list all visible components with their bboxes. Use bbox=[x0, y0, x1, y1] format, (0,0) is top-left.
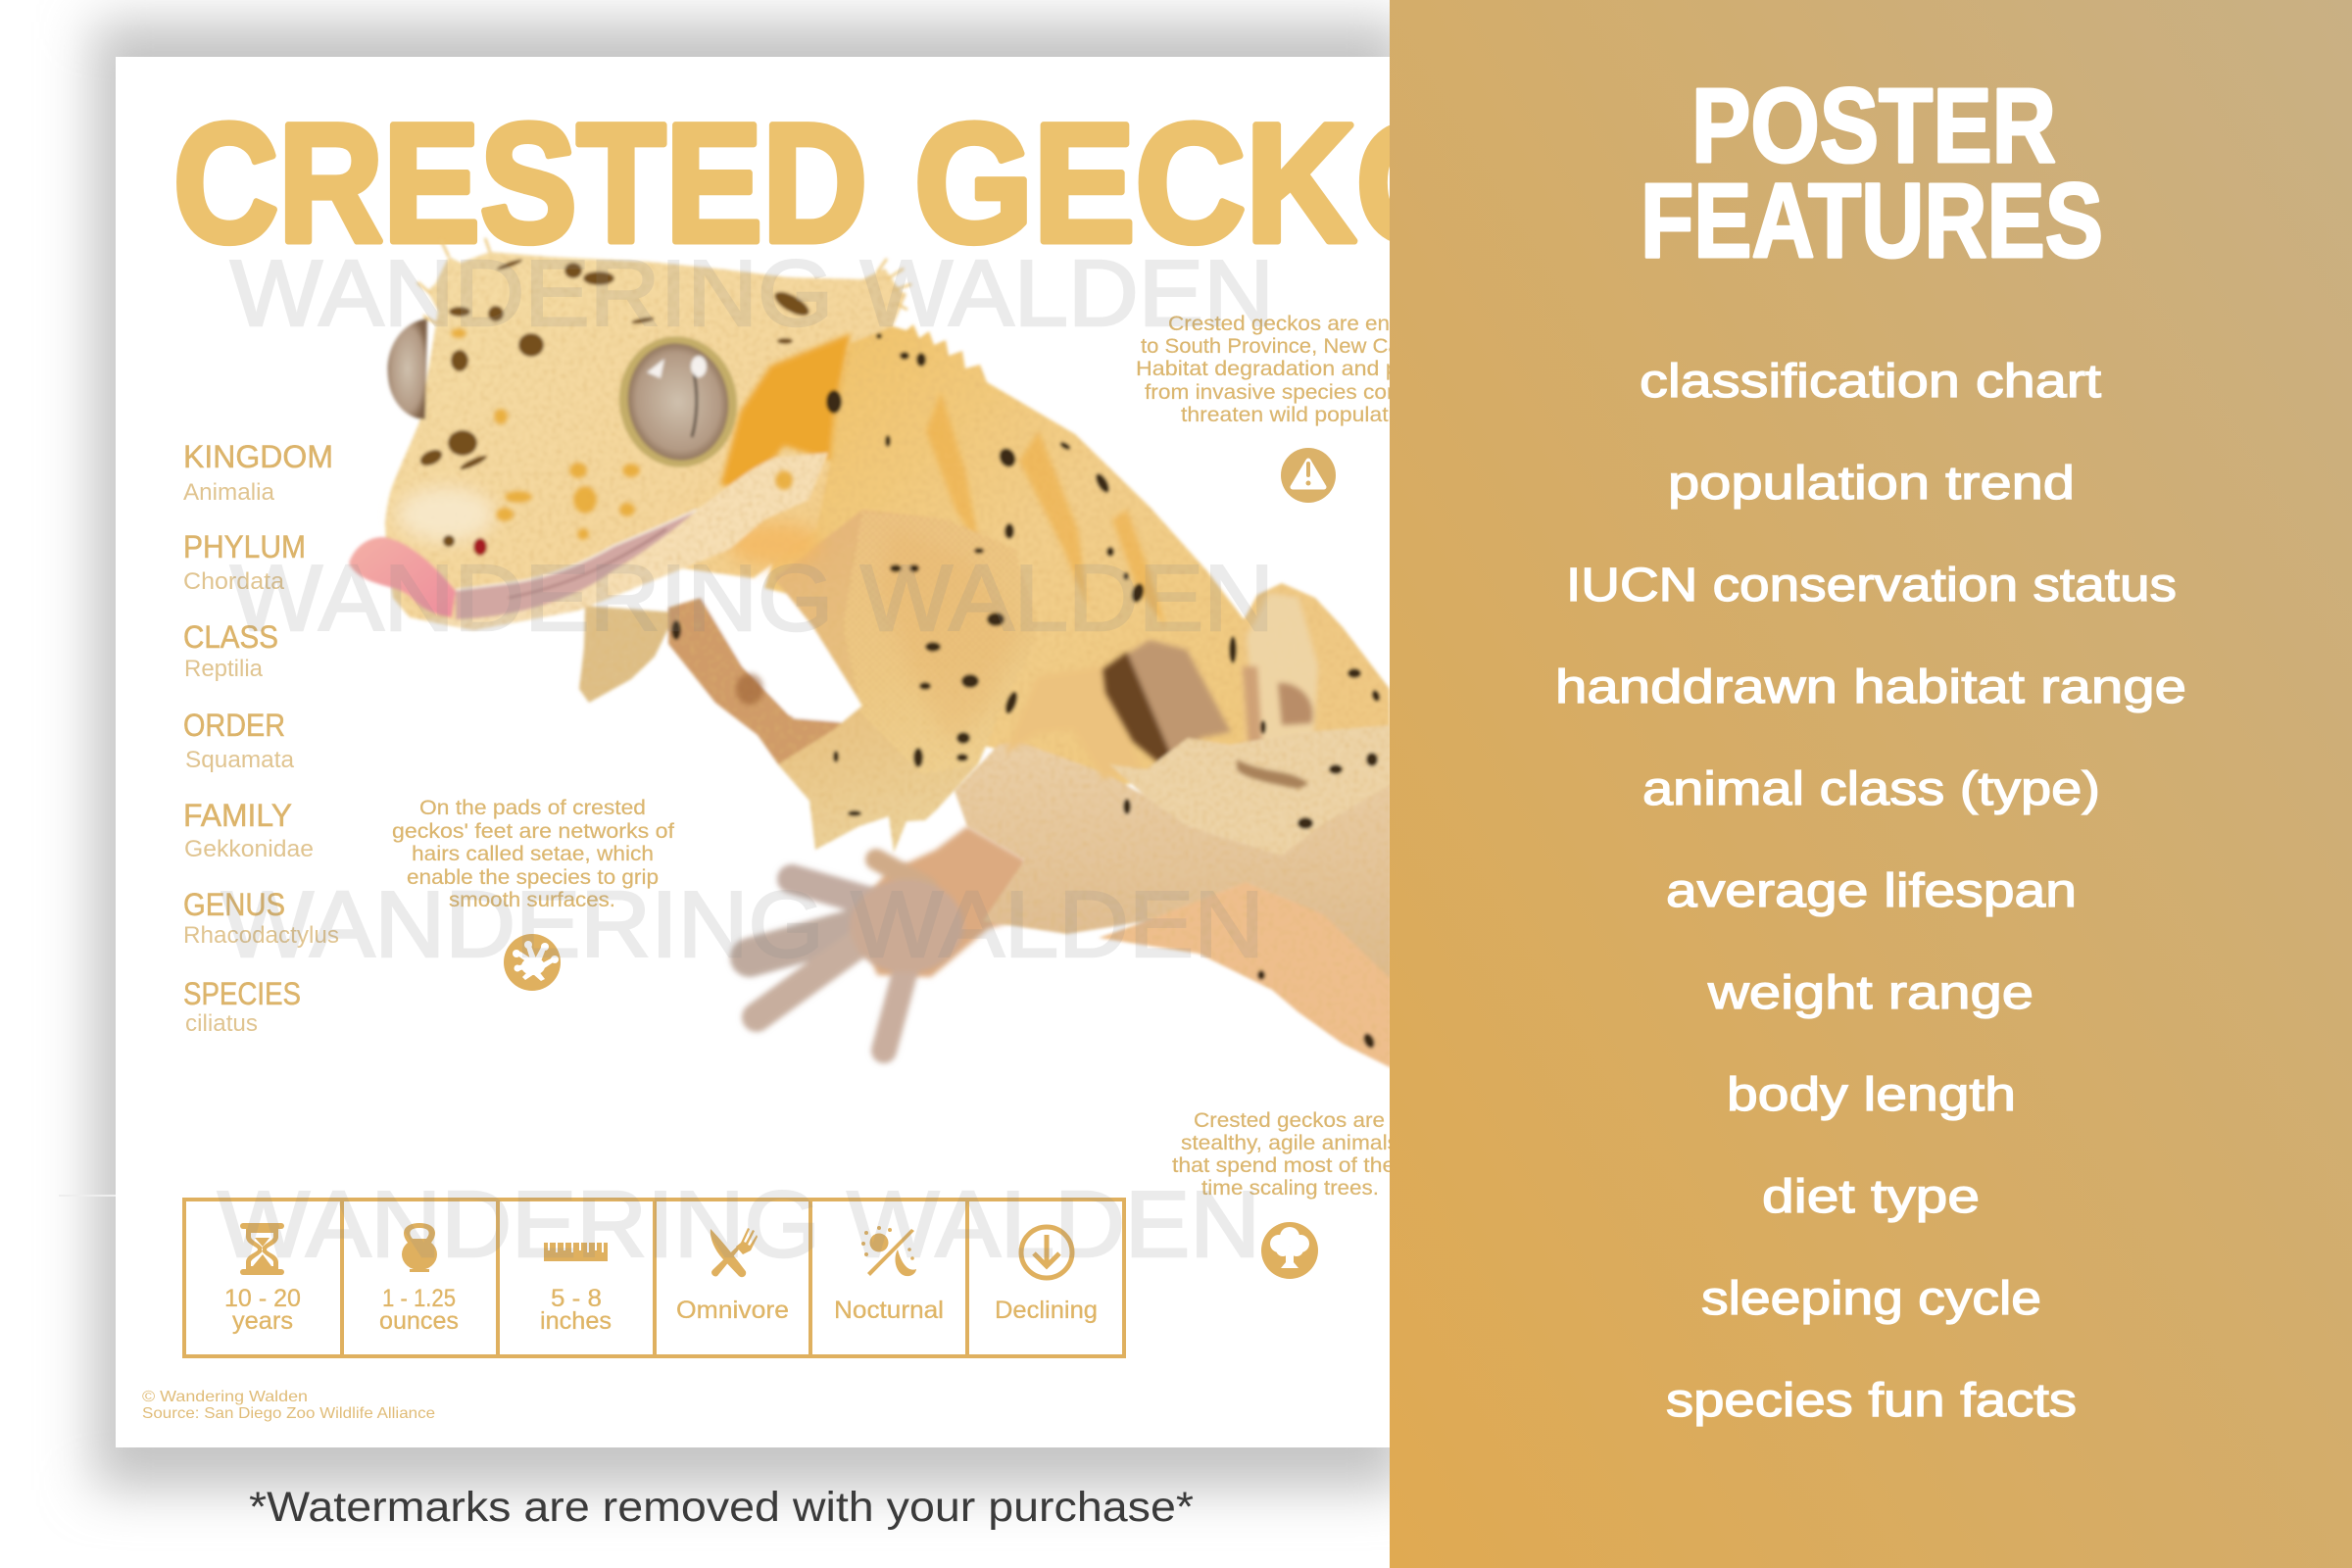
feature list: body length bbox=[1727, 1069, 2016, 1121]
hanging small leg bbox=[579, 606, 676, 703]
feature list: animal class (type) bbox=[1642, 763, 2100, 815]
stat: population trend bbox=[995, 1227, 1098, 1324]
orange head flecks bbox=[451, 328, 793, 540]
stat: lifespan: 10 - 20 bbox=[224, 1285, 301, 1312]
feature list: IUCN conservation status bbox=[1566, 560, 2177, 612]
fun fact: foot setae: geckos' feet are networks of bbox=[392, 820, 674, 843]
fun fact: conservation threat: Crested geckos are endemic bbox=[1168, 313, 1448, 335]
tongue bbox=[349, 537, 456, 617]
fun fact: conservation threat: threaten wild populations. bbox=[1181, 404, 1436, 426]
watermark notice: *Watermarks are removed with your purchase* bbox=[249, 1484, 1194, 1531]
icon: kettlebell bbox=[402, 1223, 437, 1272]
stat: diet: Omnivore bbox=[676, 1297, 789, 1324]
kingdom: KINGDOM bbox=[183, 439, 333, 474]
orange jaw glow bbox=[727, 522, 821, 565]
watermarks: WANDERING WALDEN bbox=[221, 872, 1264, 977]
panel: poster features bbox=[1390, 0, 2352, 1568]
watermarks: WANDERING WALDEN bbox=[230, 241, 1274, 346]
feature list: weight range bbox=[1707, 967, 2034, 1019]
orange body stripes bbox=[926, 392, 1166, 627]
fun fact: conservation threat bbox=[1136, 313, 1481, 426]
fun fact: climbing: stealthy, agile animals bbox=[1181, 1132, 1398, 1154]
class bbox=[183, 619, 278, 682]
far eye bbox=[388, 318, 427, 419]
icon: gecko foot bbox=[504, 934, 561, 991]
watermarks: WANDERING WALDEN bbox=[230, 546, 1274, 651]
gecko photograph illustration bbox=[349, 238, 1392, 1068]
family: FAMILY bbox=[183, 798, 292, 833]
fun fact: foot setae: hairs called setae, which bbox=[412, 843, 654, 865]
stats box bbox=[184, 1200, 1124, 1356]
stat: length bbox=[540, 1243, 612, 1335]
stat: lifespan: years bbox=[232, 1307, 293, 1335]
stats grid bbox=[184, 1200, 1124, 1356]
nostril bbox=[473, 538, 487, 556]
stat: population trend: Declining bbox=[995, 1297, 1098, 1324]
credits: © Wandering Walden bbox=[142, 1389, 308, 1405]
forearm scale dots bbox=[845, 513, 1035, 710]
feature list: sleeping cycle bbox=[1701, 1273, 2041, 1325]
stat: weight bbox=[379, 1223, 459, 1335]
panel heading: POSTER bbox=[1691, 66, 2056, 184]
stat: diet bbox=[676, 1228, 789, 1324]
stat: lifespan bbox=[224, 1223, 301, 1335]
feature list: classification chart bbox=[1640, 356, 2101, 408]
icon: hourglass bbox=[240, 1223, 284, 1275]
phylum: Chordata bbox=[183, 568, 285, 595]
title: Crested Gecko: GECKO bbox=[914, 89, 1475, 277]
panel heading: FEATURES bbox=[1641, 161, 2103, 279]
icon: fork and knife bbox=[710, 1228, 758, 1277]
poster drop shadow bbox=[93, 22, 1406, 1490]
near eye bbox=[609, 327, 748, 476]
brown arm bbox=[666, 596, 843, 766]
stat: sleep cycle: Nocturnal bbox=[834, 1297, 944, 1324]
main body bbox=[764, 324, 1264, 784]
pale muzzle bbox=[397, 487, 495, 542]
credits: Source: San Diego Zoo Wildlife Alliance bbox=[142, 1405, 435, 1422]
kingdom: Animalia bbox=[183, 479, 275, 506]
fun fact: climbing bbox=[1172, 1109, 1407, 1200]
class: CLASS bbox=[183, 619, 278, 655]
orange cheek bbox=[720, 333, 851, 490]
head and body spots bbox=[417, 258, 812, 547]
stat: weight: 1 - 1.25 bbox=[382, 1285, 456, 1312]
hind body lower right bbox=[1099, 882, 1392, 1068]
fun fact: conservation threat: to South Province, New Caledonia. bbox=[1141, 335, 1476, 358]
feature list bbox=[1555, 356, 2186, 1427]
icon: ruler bbox=[544, 1243, 608, 1261]
head bbox=[385, 252, 906, 630]
icon: sun and moon bbox=[861, 1226, 916, 1276]
title: Crested Gecko: CRESTED bbox=[173, 89, 867, 277]
stat: length: inches bbox=[540, 1307, 612, 1335]
fun fact: conservation threat: Habitat degradation and predation bbox=[1136, 358, 1481, 380]
species: ciliatus bbox=[185, 1010, 258, 1037]
watermarks: WANDERING WALDEN bbox=[218, 1172, 1260, 1277]
fun fact: climbing: time scaling trees. bbox=[1201, 1177, 1379, 1200]
feature list: species fun facts bbox=[1666, 1375, 2077, 1427]
species bbox=[183, 976, 301, 1037]
fun fact: foot setae: enable the species to grip bbox=[407, 866, 659, 889]
icon: tree bbox=[1261, 1222, 1318, 1279]
white gap between arm and body bbox=[695, 588, 844, 722]
stat: sleep cycle bbox=[834, 1226, 944, 1324]
right upper leg bump bbox=[1243, 581, 1390, 737]
fun fact: foot setae: smooth surfaces. bbox=[449, 889, 615, 911]
jaw scales bbox=[421, 453, 828, 630]
panel heading bbox=[1641, 66, 2103, 279]
icon: declining arrow bbox=[1021, 1227, 1072, 1278]
phylum bbox=[183, 529, 306, 595]
genus bbox=[183, 887, 339, 949]
title: Crested Gecko bbox=[176, 120, 1390, 247]
order: ORDER bbox=[183, 708, 285, 743]
species: SPECIES bbox=[183, 976, 301, 1011]
credits bbox=[142, 1389, 435, 1422]
feature list: average lifespan bbox=[1666, 865, 2077, 917]
order: Squamata bbox=[185, 747, 295, 773]
watermarks bbox=[218, 241, 1274, 1277]
class: Reptilia bbox=[184, 656, 264, 682]
fun fact: foot setae: On the pads of crested bbox=[419, 797, 646, 819]
fun fact: climbing: that spend most of their bbox=[1172, 1154, 1407, 1177]
phylum: PHYLUM bbox=[183, 529, 306, 564]
kingdom bbox=[183, 439, 333, 506]
classification chart bbox=[183, 439, 339, 1037]
dark brown arm blotch bbox=[736, 673, 763, 705]
foot and toes bbox=[750, 826, 1029, 1051]
crest spikes bbox=[417, 238, 911, 323]
forearm bbox=[774, 510, 1038, 853]
cream hollow behind forearm bbox=[1005, 673, 1112, 780]
icon: warning bbox=[1281, 448, 1336, 503]
fun fact: climbing: Crested geckos are bbox=[1194, 1109, 1385, 1132]
genus: GENUS bbox=[183, 887, 285, 922]
stat: weight: ounces bbox=[379, 1307, 459, 1335]
family bbox=[183, 798, 314, 862]
family: Gekkonidae bbox=[184, 836, 314, 862]
feature list: diet type bbox=[1762, 1171, 1980, 1223]
pale branch-like toe bbox=[1109, 725, 1392, 856]
feature list: handdrawn habitat range bbox=[1555, 662, 2186, 713]
order bbox=[183, 708, 295, 773]
fun fact: foot setae bbox=[392, 797, 674, 911]
feature list: population trend bbox=[1668, 458, 2075, 510]
belly bbox=[955, 742, 1392, 980]
genus: Rhacodactylus bbox=[183, 922, 339, 949]
poster sheet bbox=[116, 57, 1481, 1447]
dark flank patch bbox=[1102, 640, 1231, 771]
stat: length: 5 - 8 bbox=[551, 1285, 602, 1312]
mouth bbox=[456, 510, 697, 619]
fun fact: conservation threat: from invasive species continue to bbox=[1145, 381, 1472, 404]
